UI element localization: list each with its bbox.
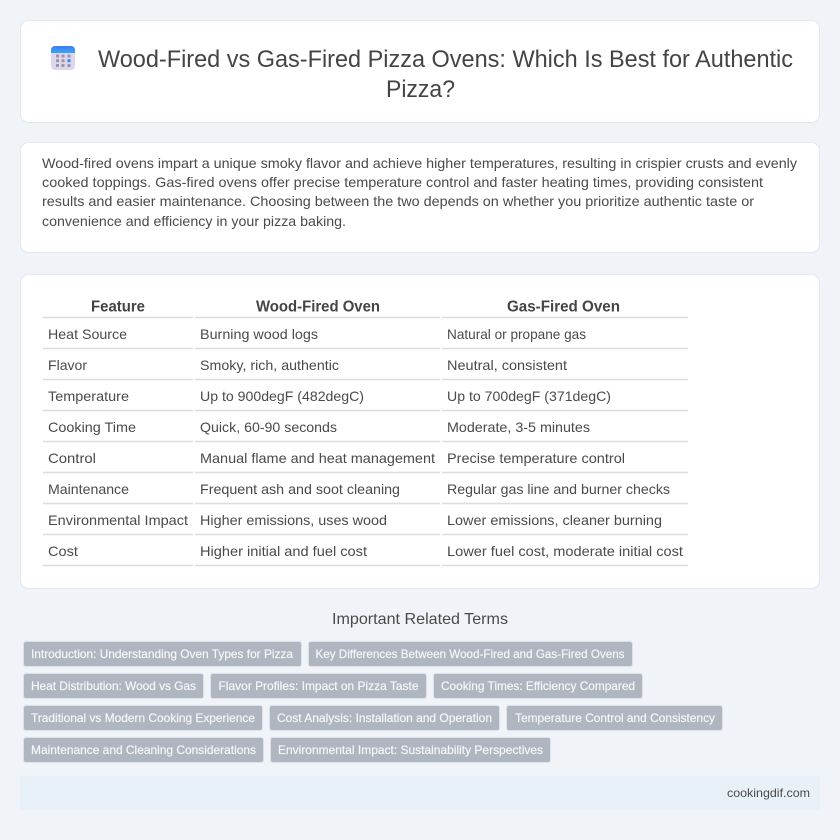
row: maintenance: Regular gas line and burner checks	[447, 481, 670, 497]
row: maintenance	[48, 481, 670, 497]
tag: maintenance	[24, 738, 264, 762]
text block: intro paragraph: cooked toppings. Gas-fired ovens offer precise temperature control and faster heating times, providing consistent	[42, 174, 763, 190]
row: heat source	[48, 326, 586, 342]
text block: intro paragraph: Wood-fired ovens impart a unique smoky flavor and achieve higher temperatures, resulting in crispier crusts and evenly	[42, 155, 797, 171]
tag: heat distribution	[24, 674, 204, 698]
related term tags	[24, 642, 722, 762]
tag: key differences	[308, 642, 632, 666]
row: control	[48, 450, 625, 466]
footer	[20, 776, 820, 810]
row: flavor: Flavor	[48, 357, 87, 373]
tag: cooking times	[434, 674, 642, 698]
tag: flavor profiles	[210, 674, 426, 698]
row: heat source: Burning wood logs	[200, 326, 318, 342]
title: Wood-Fired vs Gas-Fired Pizza Ovens: Which Is Best for Authentic	[98, 46, 793, 73]
title: Pizza?	[386, 76, 455, 103]
tag: maintenance: Maintenance and Cleaning Considerations	[31, 743, 256, 757]
row: control: Control	[48, 450, 96, 466]
row: environmental impact: Environmental Impact	[48, 512, 188, 528]
table header: Feature	[91, 298, 145, 316]
row: environmental impact: Higher emissions, uses wood	[200, 512, 387, 528]
tag: key differences: Key Differences Between Wood-Fired and Gas-Fired Ovens	[316, 647, 624, 661]
row: flavor: Smoky, rich, authentic	[200, 357, 339, 373]
tag: cost analysis: Cost Analysis: Installation and Operation	[277, 711, 492, 725]
row: cooking time: Cooking Time	[48, 419, 136, 435]
row: flavor: Neutral, consistent	[447, 357, 567, 373]
row: maintenance: Frequent ash and soot cleaning	[200, 481, 400, 497]
footer: cookingdif.com	[727, 786, 810, 800]
row: cost: Higher initial and fuel cost	[200, 543, 367, 559]
heading: related terms: Important Related Terms	[332, 611, 508, 628]
row: cooking time	[48, 419, 590, 435]
row: cooking time: Quick, 60-90 seconds	[200, 419, 337, 435]
panel: comparison table	[20, 274, 820, 588]
row: cooking time: Moderate, 3-5 minutes	[447, 419, 590, 435]
table header	[43, 298, 688, 566]
tag: traditional vs modern	[24, 706, 262, 730]
row: heat source: Heat Source	[48, 326, 127, 342]
title	[98, 46, 793, 103]
row: environmental impact: Lower emissions, cleaner burning	[447, 512, 662, 528]
row: flavor	[48, 357, 567, 373]
row: temperature: Up to 900degF (482degC)	[200, 388, 364, 404]
row: cost	[48, 543, 683, 559]
panel: intro	[20, 142, 820, 252]
panel: header	[20, 20, 820, 122]
row: maintenance: Maintenance	[48, 481, 129, 497]
tag: temperature control: Temperature Control and Consistency	[515, 711, 715, 725]
text block: intro paragraph: results and easier maintenance. Choosing between the two depends on whether you prioritize authentic taste or	[42, 193, 754, 209]
tag: introduction	[24, 642, 302, 666]
table header: Gas-Fired Oven	[507, 298, 620, 316]
tag: temperature control	[506, 706, 722, 730]
text block: intro paragraph: convenience and efficiency in your pizza baking.	[42, 213, 346, 229]
row: control: Precise temperature control	[447, 450, 625, 466]
row: temperature	[48, 388, 611, 404]
row: control: Manual flame and heat management	[200, 450, 435, 466]
row: temperature: Up to 700degF (371degC)	[447, 388, 611, 404]
text block: intro paragraph	[42, 155, 797, 229]
row: cost: Lower fuel cost, moderate initial cost	[447, 543, 683, 559]
tag: traditional vs modern: Traditional vs Modern Cooking Experience	[31, 711, 255, 725]
tag: environmental impact: Environmental Impact: Sustainability Perspectives	[278, 743, 543, 757]
tag: environmental impact	[270, 738, 550, 762]
icon: calendar	[51, 46, 75, 70]
row: environmental impact	[48, 512, 662, 528]
row: temperature: Temperature	[48, 388, 129, 404]
tag: cost analysis	[270, 706, 500, 730]
row: cost: Cost	[48, 543, 78, 559]
tag: introduction: Introduction: Understanding Oven Types for Pizza	[31, 647, 293, 661]
tag: heat distribution: Heat Distribution: Wood vs Gas	[31, 679, 196, 693]
table header: Wood-Fired Oven	[256, 298, 380, 316]
tag: flavor profiles: Flavor Profiles: Impact on Pizza Taste	[218, 679, 419, 693]
tag: cooking times: Cooking Times: Efficiency Compared	[441, 679, 635, 693]
row: heat source: Natural or propane gas	[447, 326, 586, 342]
